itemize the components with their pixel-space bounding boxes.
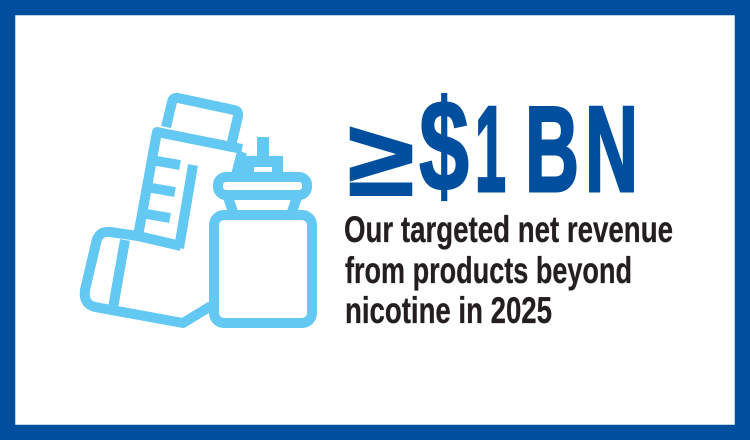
icon: bottle nozzle — [242, 137, 283, 174]
icon: inhaler base — [85, 232, 211, 323]
heading: at least $1BN: 1 — [475, 81, 506, 217]
text block: description: nicotine in 2025 — [345, 290, 552, 331]
letter N: N — [585, 81, 638, 217]
dollar sign: $ — [419, 72, 469, 218]
icon: bottle neck — [228, 152, 297, 212]
icon: inhaler cap — [166, 98, 238, 142]
icon: inhaler and bottle — [85, 98, 312, 323]
heading: at least $1BN — [348, 72, 638, 218]
icon: bottle body — [214, 215, 312, 323]
text block: description: from products beyond — [345, 250, 632, 291]
icon: inhaler body — [138, 132, 242, 248]
letter B: B — [525, 81, 579, 217]
greater than or equal sign: ≥ — [348, 100, 414, 218]
text block: description — [344, 209, 673, 331]
icon: bottle collar — [218, 177, 307, 195]
